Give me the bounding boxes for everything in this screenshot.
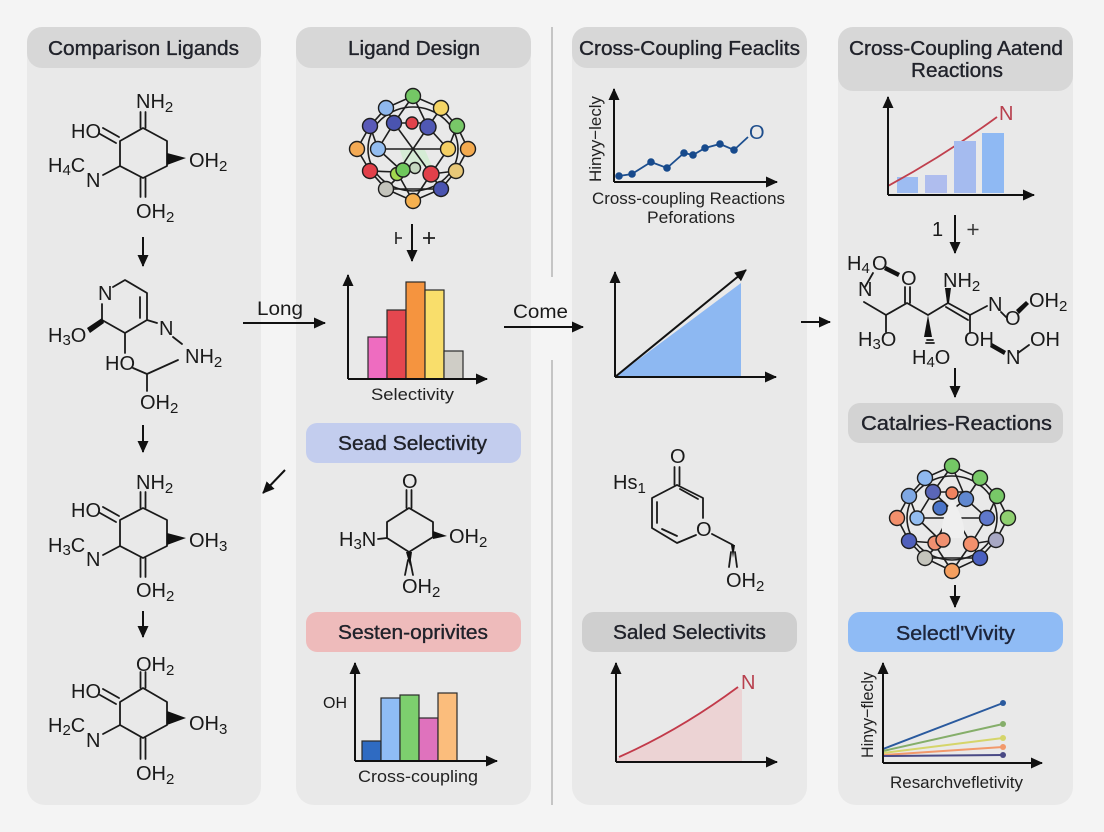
molecule 3: HO xyxy=(71,500,101,522)
label pill: sead selectivity xyxy=(306,423,521,463)
line chart: cross-coupling reactions: Cross-coupling Reactions xyxy=(592,189,785,208)
molecule 7: O xyxy=(935,347,950,369)
molecule 1: C xyxy=(71,155,85,177)
molecule 1: 4 xyxy=(62,162,71,179)
molecule 7: 3 xyxy=(872,336,881,353)
icon: ligand sphere xyxy=(350,88,476,208)
molecule 1: N xyxy=(86,170,100,192)
molecule 4: HO xyxy=(71,681,101,703)
molecule 4 xyxy=(48,654,227,788)
arrow: step 1 xyxy=(142,237,144,266)
label pill: catalries reactions: Catalries-Reactions xyxy=(861,413,1052,435)
heading: cross-coupling feaclits: Cross-Coupling Feaclits xyxy=(579,38,800,60)
molecule 4: N xyxy=(86,730,100,752)
molecule 6: O xyxy=(696,519,712,541)
label pill: sesten-oprivites xyxy=(306,612,521,652)
molecule 7: 2 xyxy=(972,278,980,295)
molecule 4: OH xyxy=(189,713,219,735)
bar chart: cross-coupling xyxy=(323,663,497,786)
molecule 5: O xyxy=(402,471,418,493)
arrow: come xyxy=(504,302,583,327)
label pill: selectivity xyxy=(848,612,1063,652)
molecule 7: 4 xyxy=(926,354,935,371)
arrow: long: Long xyxy=(257,299,303,320)
arrow: to final panel xyxy=(801,321,830,323)
molecule 6 xyxy=(613,446,764,595)
arrow: step 3 xyxy=(142,611,144,637)
molecule 4: OH xyxy=(136,763,166,785)
molecule 2: 2 xyxy=(170,400,178,417)
molecule 3: 3 xyxy=(62,542,71,559)
molecule 3: 2 xyxy=(166,588,174,605)
molecule 2: OH xyxy=(140,392,170,414)
molecule 7: O xyxy=(901,268,917,290)
molecule 7: 2 xyxy=(1059,298,1067,315)
heading: cross-coupling aatend reactions: Cross-Coupling Aatend xyxy=(849,38,1063,60)
arrow: back to ligands xyxy=(263,470,285,493)
label pill: sesten-oprivites: Sesten-oprivites xyxy=(338,622,488,644)
line chart: cross-coupling reactions: O xyxy=(749,122,765,144)
line chart: cross-coupling reactions: Hinyy−lecly xyxy=(586,96,605,182)
molecule 3: N xyxy=(86,549,100,571)
molecule 7: OH xyxy=(1029,290,1059,312)
label pill: sead selectivity: Sead Selectivity xyxy=(338,433,487,455)
molecule 5: OH xyxy=(402,576,432,598)
arrow with labels xyxy=(396,224,435,261)
combo chart: N xyxy=(999,103,1013,125)
molecule 2: 3 xyxy=(62,332,71,349)
line chart: research selectivity xyxy=(858,663,1042,792)
heading: ligand design xyxy=(296,27,531,68)
molecule 1: 2 xyxy=(219,158,227,175)
molecule 7: H xyxy=(912,347,926,369)
molecule 3: OH xyxy=(189,530,219,552)
molecule 7: O xyxy=(881,329,896,351)
molecule 5: N xyxy=(362,529,376,551)
line chart: research selectivity: Hinyy−flecly xyxy=(858,672,877,758)
molecule 4: C xyxy=(71,715,85,737)
molecule 7: O xyxy=(872,253,888,275)
molecule 3: NH xyxy=(136,472,165,494)
molecule 7: H xyxy=(858,329,872,351)
heading: ligand design: Ligand Design xyxy=(348,38,480,60)
line chart: research selectivity: Resarchvefletivity xyxy=(890,773,1023,792)
molecule 2: N xyxy=(98,283,112,305)
combo chart xyxy=(888,97,1034,195)
molecule 6: 2 xyxy=(756,578,764,595)
arrow: to catalysis xyxy=(954,368,956,397)
molecule 1: HO xyxy=(71,121,101,143)
molecule 7: H xyxy=(847,253,861,275)
molecule 1: H xyxy=(48,155,62,177)
molecule 4: 2 xyxy=(62,722,71,739)
heading: cross-coupling feaclits xyxy=(572,27,807,68)
arrow with labels: 1 xyxy=(932,219,943,241)
molecule 7: N xyxy=(988,294,1002,316)
molecule 5 xyxy=(339,471,487,601)
molecule 3 xyxy=(48,472,227,605)
arrow: step 2 xyxy=(142,425,144,452)
molecule 5: 2 xyxy=(432,584,440,601)
label pill: saled selectivits: Saled Selectivits xyxy=(613,622,766,644)
icon: catalyst sphere xyxy=(890,458,1016,578)
molecule 3: C xyxy=(71,535,85,557)
heading: comparison ligands: Comparison Ligands xyxy=(48,38,239,60)
panel: cross-coupling feaclits xyxy=(572,27,807,805)
panel: comparison ligands xyxy=(27,27,261,805)
molecule 5: 2 xyxy=(479,534,487,551)
area chart: red: N xyxy=(741,672,755,694)
molecule 1: NH xyxy=(136,91,165,113)
molecule 7: OH xyxy=(1030,329,1060,351)
molecule 1: OH xyxy=(189,150,219,172)
molecule 2: NH xyxy=(185,346,214,368)
arrow: to selectivity xyxy=(954,585,956,607)
molecule 7: O xyxy=(1005,308,1021,330)
molecule 2: 2 xyxy=(214,354,222,371)
molecule 4: 2 xyxy=(166,662,174,679)
molecule 3: 2 xyxy=(165,480,173,497)
bar chart: cross-coupling: OH xyxy=(323,695,347,712)
molecule 7: 4 xyxy=(861,260,870,277)
molecule 4: 3 xyxy=(219,721,227,738)
molecule 7: N xyxy=(1006,347,1020,369)
molecule 3: 3 xyxy=(219,538,227,555)
molecule 1: 2 xyxy=(165,99,173,116)
molecule 2: O xyxy=(71,325,86,347)
molecule 7: OH xyxy=(964,329,994,351)
bar chart: selectivity xyxy=(348,275,487,404)
molecule 2: N xyxy=(159,318,173,340)
line chart: cross-coupling reactions xyxy=(586,89,785,227)
panel: cross-coupling reactions xyxy=(838,27,1073,805)
area chart: red xyxy=(616,663,777,762)
label pill: selectivity: Selectl'Vivity xyxy=(896,623,1015,645)
molecule 7: N xyxy=(858,279,872,301)
bar chart: selectivity: Selectivity xyxy=(371,385,455,404)
molecule 6: 1 xyxy=(637,480,646,497)
arrow: long xyxy=(243,299,325,323)
molecule 6: OH xyxy=(726,570,756,592)
molecule 2: HO xyxy=(105,353,135,375)
molecule 3: OH xyxy=(136,580,166,602)
area chart: blue xyxy=(615,270,776,377)
molecule 7: NH xyxy=(943,270,972,292)
panel: ligand design xyxy=(296,27,531,805)
molecule 4: OH xyxy=(136,654,166,676)
molecule 5: H xyxy=(339,529,353,551)
heading: cross-coupling aatend reactions: Reactions xyxy=(911,60,1003,82)
molecule 4: H xyxy=(48,715,62,737)
molecule 1 xyxy=(48,91,227,226)
molecule 6: Hs xyxy=(613,472,637,494)
bar chart: cross-coupling: Cross-coupling xyxy=(358,767,478,786)
arrow: come: Come xyxy=(513,302,568,323)
arrow with labels xyxy=(932,215,978,253)
molecule 3: H xyxy=(48,535,62,557)
label pill: catalries reactions xyxy=(848,403,1063,443)
heading: comparison ligands xyxy=(27,27,261,68)
molecule 7 xyxy=(847,253,1067,371)
line chart: cross-coupling reactions: Peforations xyxy=(647,208,735,227)
molecule 6: O xyxy=(670,446,686,468)
label pill: saled selectivits xyxy=(582,612,797,652)
molecule 1: 2 xyxy=(166,209,174,226)
molecule 1: OH xyxy=(136,201,166,223)
molecule 5: OH xyxy=(449,526,479,548)
molecule 2 xyxy=(48,280,222,417)
molecule 2: H xyxy=(48,325,62,347)
molecule 4: 2 xyxy=(166,771,174,788)
divider xyxy=(551,27,553,805)
heading: cross-coupling aatend reactions xyxy=(838,27,1073,91)
molecule 5: 3 xyxy=(353,536,362,553)
